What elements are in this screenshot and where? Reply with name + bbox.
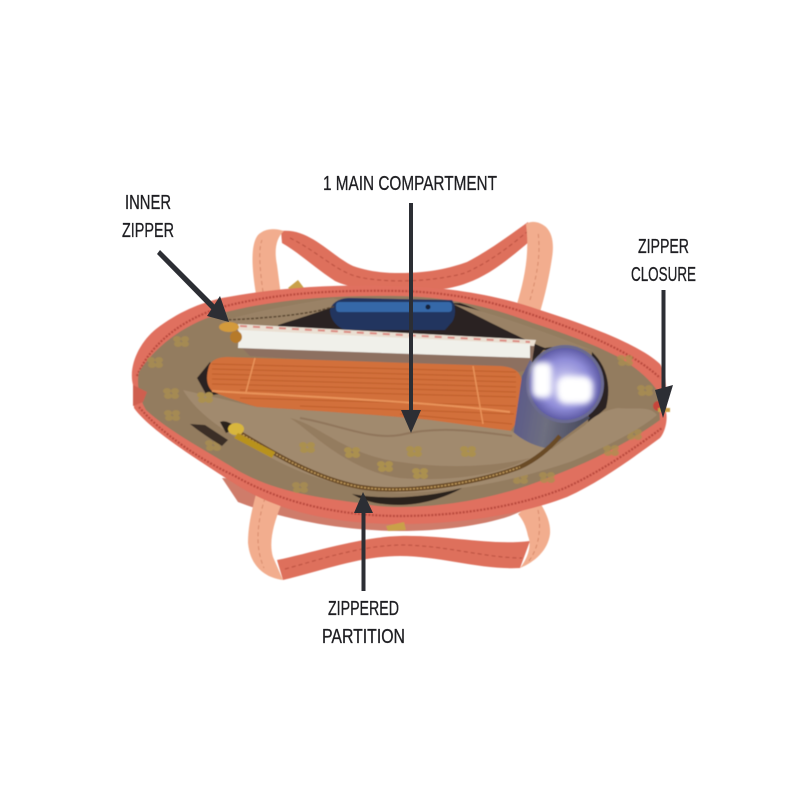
label: zipper closure: CLOSURE <box>631 264 696 286</box>
water bottle <box>513 345 604 449</box>
label: zippered partition: PARTITION <box>322 626 405 648</box>
phone <box>330 298 455 330</box>
lining pattern <box>147 336 653 493</box>
label: inner zipper: ZIPPER <box>122 220 174 242</box>
label: zippered partition <box>322 598 405 648</box>
arrow: inner zipper <box>157 250 229 322</box>
gold zipper pull <box>228 423 275 458</box>
label: zipper closure <box>631 236 696 286</box>
orange wallet <box>207 357 522 432</box>
back handle <box>252 222 553 312</box>
inner zipper pull <box>219 306 335 343</box>
pocket shading and pattern <box>197 392 530 479</box>
label: inner zipper <box>122 192 174 242</box>
label: zippered partition: ZIPPERED <box>328 598 399 620</box>
label: zipper closure: ZIPPER <box>638 236 689 258</box>
dark interior <box>197 303 608 424</box>
zipper partition <box>190 421 560 505</box>
handbag illustration <box>132 222 670 580</box>
front panel of bag <box>222 478 560 531</box>
arrow: main compartment <box>401 203 421 433</box>
gold clasp <box>386 522 406 531</box>
arrow: zippered partition <box>354 492 373 591</box>
lining <box>138 296 660 507</box>
back pocket flap <box>220 298 600 353</box>
notebook <box>230 324 536 372</box>
center pleated pocket <box>183 390 657 493</box>
label: inner zipper: INNER <box>125 192 171 214</box>
label: 1 main compartment: 1 MAIN COMPARTMENT <box>323 173 497 195</box>
arrow: zipper closure <box>655 290 673 418</box>
front handle <box>248 490 550 580</box>
zipper rim <box>132 285 667 524</box>
rim stitching <box>137 291 662 516</box>
side zipper end <box>133 385 670 412</box>
